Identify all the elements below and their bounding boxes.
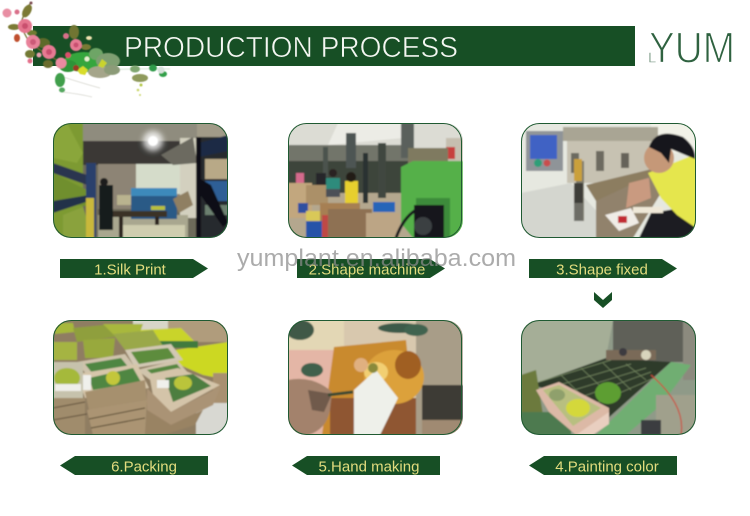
label arrow: 1.Silk Print xyxy=(60,259,208,278)
panel: step 5 hand making xyxy=(286,320,463,476)
icon: floral decoration xyxy=(2,2,170,97)
photo: worker at shaping machine xyxy=(521,123,696,238)
label arrow: 1.Silk Print: 1.Silk Print xyxy=(94,262,167,278)
title: PRODUCTION PROCESS xyxy=(124,32,458,64)
label arrow: 3.Shape fixed xyxy=(529,259,677,278)
label arrow: 4.Painting color xyxy=(529,456,677,476)
label arrow: 2.Shape machine: 2.Shape machine xyxy=(309,262,425,278)
label arrow: 5.Hand making xyxy=(292,456,440,476)
watermark: yumplant.en.alibaba.com xyxy=(237,245,516,272)
panel: step 3 shape fixed xyxy=(521,123,696,278)
logo: YUM: YUM xyxy=(649,24,735,72)
label arrow: 3.Shape fixed: 3.Shape fixed xyxy=(556,262,648,278)
label arrow: 5.Hand making: 5.Hand making xyxy=(319,458,419,476)
photo: hand making xyxy=(286,320,463,435)
label arrow: 2.Shape machine xyxy=(297,259,445,278)
logo: YUM: L xyxy=(648,50,656,66)
arrow: down chevron xyxy=(594,292,612,308)
panel: step 6 packing xyxy=(53,320,228,476)
panel: step 1 silk print xyxy=(53,123,228,278)
label arrow: 6.Packing: 6.Packing xyxy=(111,458,177,476)
panel: step 4 painting color xyxy=(521,320,696,476)
photo: silk print workshop xyxy=(53,123,228,238)
photo: shape machine factory floor xyxy=(288,123,463,238)
label arrow: 6.Packing xyxy=(60,456,208,476)
photo: painting station xyxy=(521,320,696,435)
title banner xyxy=(33,26,635,66)
photo: packed boxes xyxy=(53,320,228,435)
panel: step 2 shape machine xyxy=(288,123,463,278)
label arrow: 4.Painting color: 4.Painting color xyxy=(555,458,659,476)
